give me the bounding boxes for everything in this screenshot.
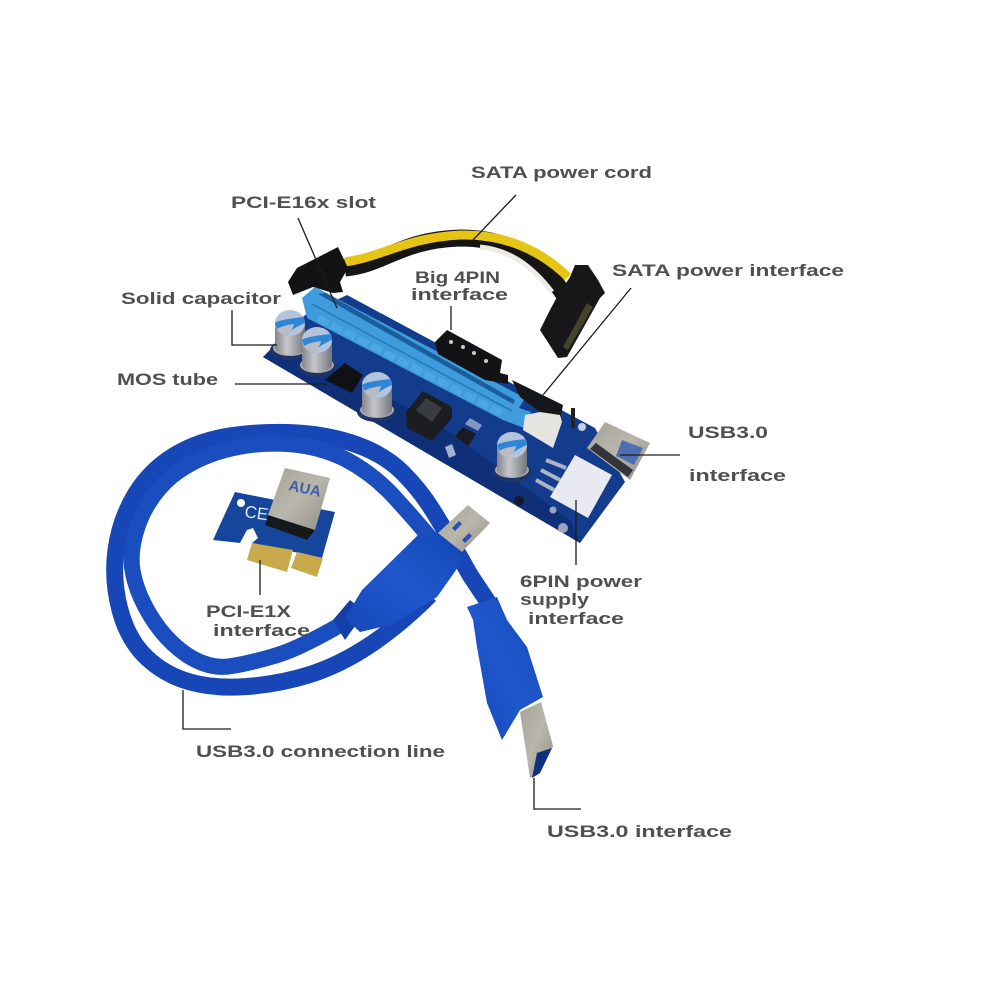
icon: black header	[512, 380, 575, 428]
PCI-E 16x slot	[302, 287, 531, 428]
label: USB3.0 interface right: USB3.0	[688, 423, 768, 442]
icon: capacitor 2	[297, 327, 337, 377]
label: PCI-E1X interface: PCI-E1X	[206, 602, 292, 621]
icon: USB socket: AUA	[287, 477, 323, 501]
SATA power cable	[288, 235, 568, 296]
label: 6PIN power supply interface: 6PIN power	[520, 572, 642, 591]
icon: USB plug B	[467, 597, 553, 778]
label: Solid capacitor: Solid capacitor	[121, 289, 281, 308]
icon: 6-pin pins	[536, 460, 566, 490]
label: SATA power cord: SATA power cord	[471, 163, 652, 182]
label: Big 4PIN interface: interface	[411, 285, 508, 304]
icon: USB plug A	[333, 505, 490, 640]
label: Big 4PIN interface: Big 4PIN	[415, 268, 500, 287]
icon: inductor	[406, 391, 452, 441]
label: 6PIN power supply interface	[520, 572, 642, 628]
label: USB3.0 interface right: interface	[689, 466, 786, 485]
label: Big 4PIN interface	[411, 268, 508, 304]
CE mark: CE	[243, 502, 269, 524]
gold fingers	[247, 543, 323, 577]
icon: capacitor 1	[270, 310, 310, 360]
icon: board USB port	[587, 422, 650, 480]
icon: black socket base	[265, 515, 315, 540]
icon: small chips	[445, 418, 482, 458]
icon: MOS tube	[325, 363, 363, 393]
label: PCI-E16x slot: PCI-E16x slot	[231, 193, 376, 212]
icon: 6-pin power connector	[550, 455, 612, 518]
PCI-E 1X adapter card	[213, 468, 335, 577]
icon: capacitor 4	[492, 432, 532, 482]
label: USB3.0 interface bottom: USB3.0 interface	[547, 822, 732, 841]
icon: white connector	[523, 412, 562, 448]
label: USB3.0 connection line: USB3.0 connection line	[196, 742, 445, 761]
icon: capacitor 3	[357, 372, 397, 422]
label: 6PIN power supply interface: supply	[520, 590, 590, 609]
icon: big 4-pin connector	[435, 330, 508, 384]
label: PCI-E1X interface	[206, 602, 310, 640]
label: 6PIN power supply interface: interface	[528, 609, 624, 628]
leader lines	[183, 195, 680, 809]
label: MOS tube: MOS tube	[117, 370, 218, 389]
icon: 6-pin cable connector	[288, 247, 348, 295]
icon: SATA connector	[540, 265, 605, 358]
label: USB3.0 interface right	[688, 423, 786, 485]
label: SATA power interface: SATA power interface	[612, 261, 844, 280]
label: PCI-E1X interface: interface	[213, 621, 310, 640]
icon: board mounting holes	[514, 423, 586, 533]
riser board	[263, 287, 650, 543]
USB cable	[115, 432, 553, 778]
